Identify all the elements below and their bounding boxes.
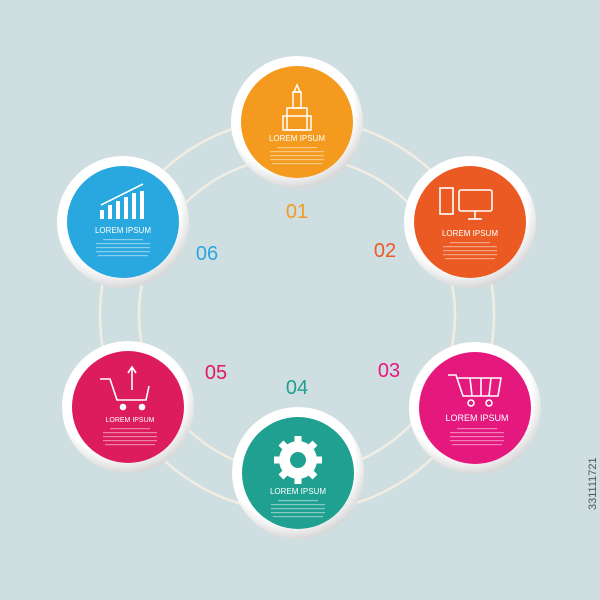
step 02 circle: LOREM IPSUM <box>442 229 498 238</box>
step 04 circle <box>232 407 364 539</box>
number labels: 05 <box>205 362 227 384</box>
step 01 circle: LOREM IPSUM <box>269 134 325 143</box>
step 04 circle: LOREM IPSUM <box>270 487 326 496</box>
step 06 circle: LOREM IPSUM <box>95 226 151 235</box>
icon: gear <box>274 436 322 484</box>
step 05 circle <box>62 341 194 473</box>
connector ring <box>100 118 494 512</box>
number labels: 04 <box>286 377 308 399</box>
icon: bar chart growth <box>100 184 144 219</box>
step 05 circle: LOREM IPSUM <box>105 417 155 424</box>
number labels: 06 <box>196 243 218 265</box>
step 03 circle: LOREM IPSUM <box>445 413 509 423</box>
watermark id: 331111721 <box>587 457 599 510</box>
icon: computer <box>440 188 492 219</box>
step 01 circle <box>231 56 363 188</box>
number labels: 02 <box>374 240 396 262</box>
icon: building <box>283 85 311 130</box>
icon: cart with arrow <box>100 367 149 410</box>
step 02 circle <box>404 156 536 288</box>
number labels: 03 <box>378 360 400 382</box>
step 03 circle <box>409 342 541 474</box>
number labels: 01 <box>286 201 308 223</box>
icon: cart <box>448 375 501 406</box>
step 06 circle <box>57 156 189 288</box>
number labels <box>196 201 400 399</box>
